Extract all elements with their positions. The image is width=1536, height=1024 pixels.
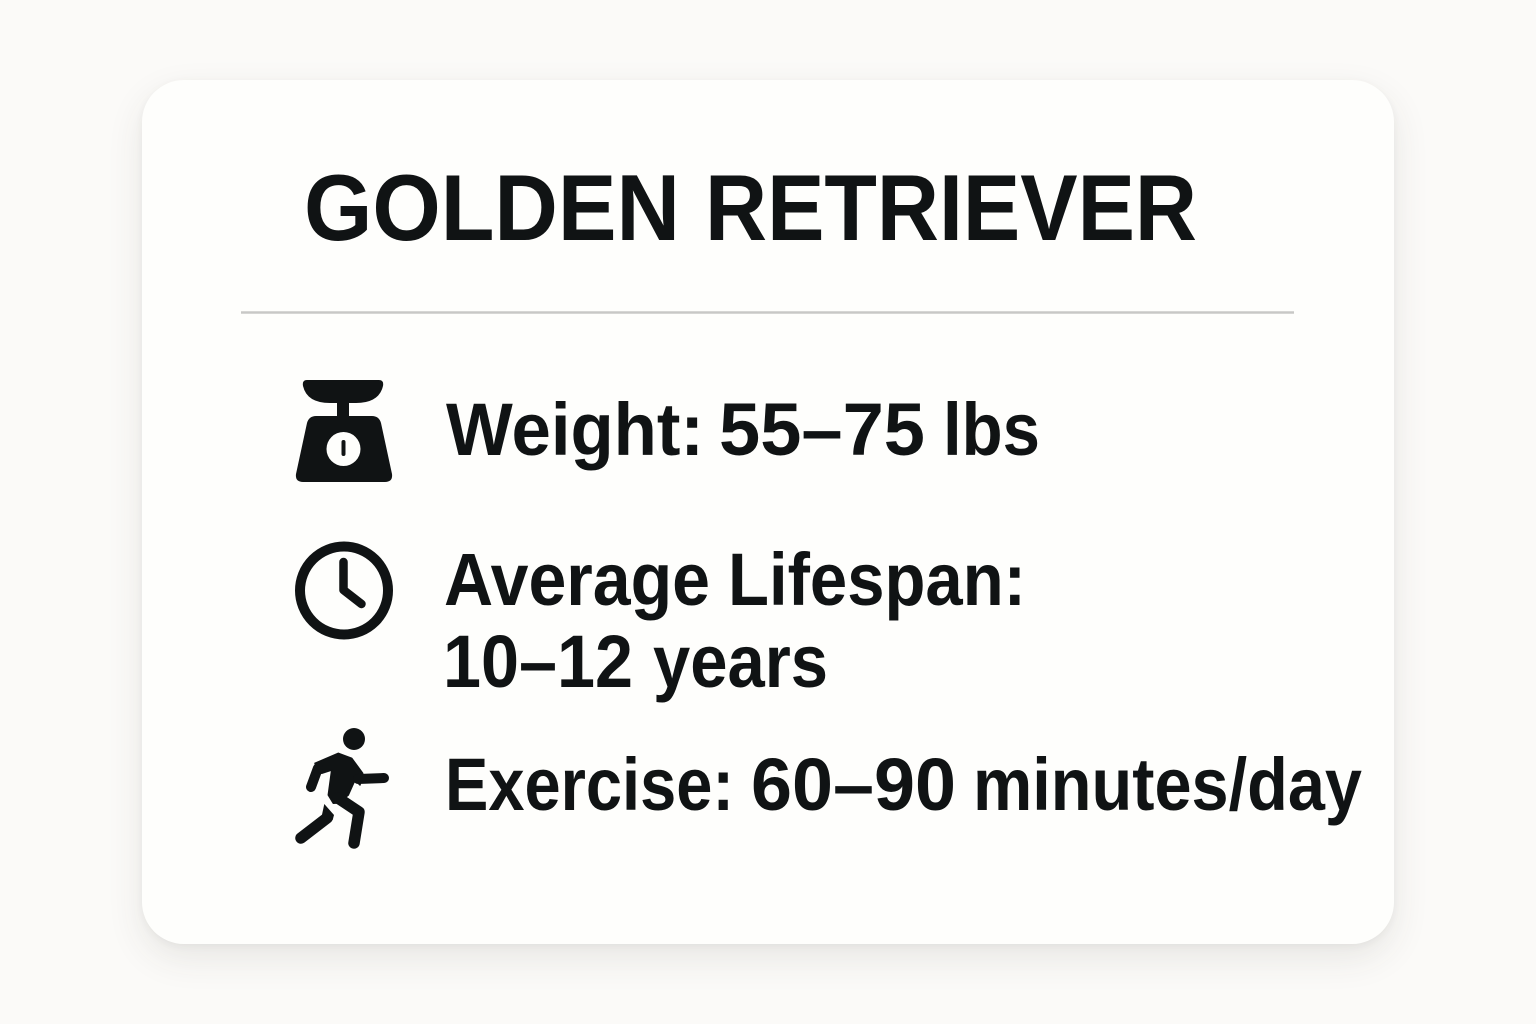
exercise text: minutes/day [973, 743, 1362, 826]
lifespan text: 10–12 [443, 620, 633, 703]
icon: clock [300, 546, 388, 634]
weight text [446, 388, 1040, 471]
lifespan text: Average [444, 538, 710, 621]
title: RETRIEVER [705, 155, 1197, 260]
title [304, 155, 1197, 260]
weight text: lbs [943, 388, 1040, 471]
panel: breed info card [142, 80, 1394, 944]
lifespan text: Lifespan: [728, 538, 1026, 621]
lifespan text [443, 538, 1026, 703]
weight text: Weight: [446, 388, 704, 471]
exercise text: 60–90 [751, 743, 956, 826]
exercise text [445, 743, 1362, 826]
lifespan text: years [653, 620, 828, 703]
exercise text: Exercise: [445, 743, 734, 826]
icon: running person [301, 728, 384, 843]
icon: kitchen scale [296, 380, 392, 482]
weight text: 55–75 [719, 388, 925, 471]
title: GOLDEN [304, 155, 680, 260]
